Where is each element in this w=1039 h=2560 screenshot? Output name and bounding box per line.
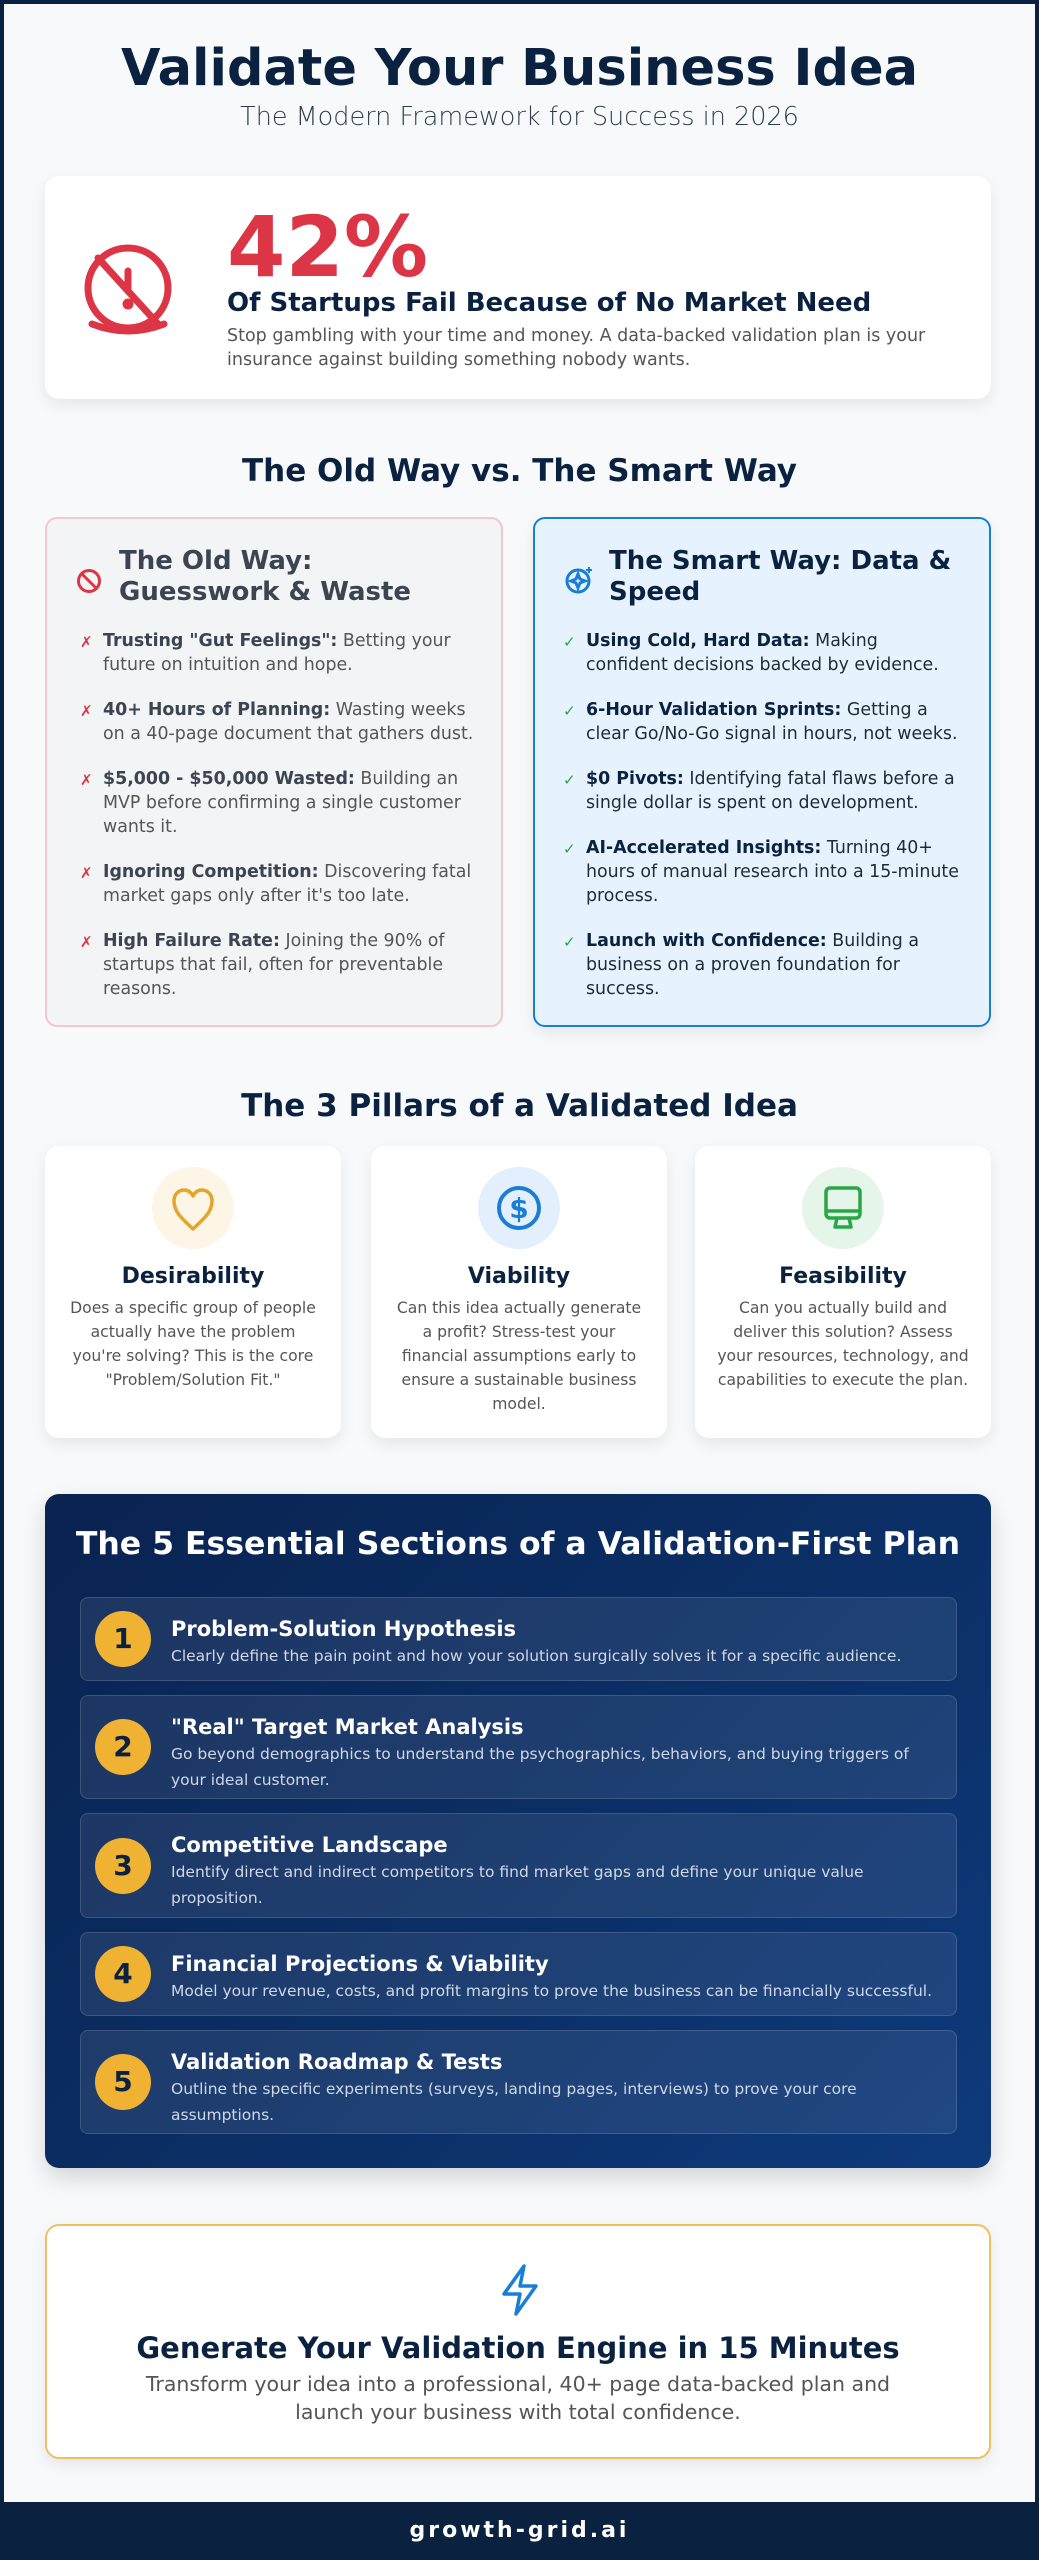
row 1 <box>80 1597 957 1681</box>
heading: 3 pillars: The 3 Pillars of a Validated Idea <box>241 1088 798 1124</box>
stat description: Stop gambling with your time and money. A data-backed validation plan is your insurance against building something nobody wants. <box>227 326 925 370</box>
row 3: Identify direct and indirect competitors to find market gaps and define your unique value proposition. <box>171 1863 864 1907</box>
CTA heading: Generate Your Validation Engine in 15 Minutes <box>136 2331 900 2365</box>
panel heading <box>609 546 951 607</box>
pillar: desirability: Does a specific group of people actually have the problem you're solving? This is the core "Problem/Solution Fit." <box>70 1299 316 1389</box>
row 5 <box>80 2030 957 2134</box>
row 1: 1 <box>113 1622 133 1655</box>
item list: Trusting "Gut Feelings": Betting your future on intuition and hope. <box>103 631 451 675</box>
icon: monitor <box>802 1167 884 1249</box>
pillar: feasibility: Can you actually build and <box>739 1299 947 1317</box>
pillar: feasibility: deliver this solution? Assess <box>733 1323 953 1341</box>
item list: ✗ <box>80 633 93 651</box>
item list: ✓ <box>563 771 576 789</box>
stat number: 42% <box>227 198 428 296</box>
item list: Launch with Confidence: Building a business on a proven foundation for success. <box>586 931 919 999</box>
footer <box>0 2502 1039 2560</box>
pillar: feasibility <box>695 1146 991 1438</box>
item list: confident decisions backed by evidence. <box>586 655 939 675</box>
row 2: Go beyond demographics to understand the psychographics, behaviors, and buying triggers of your ideal customer. <box>171 1745 909 1789</box>
panel: old way <box>45 517 503 1027</box>
item list: ✓ <box>563 702 576 720</box>
item list: ✗ <box>80 933 93 951</box>
footer: growth-grid.ai <box>410 2518 629 2543</box>
row 2 <box>80 1695 957 1799</box>
CTA description: Transform your idea into a professional, 40+ page data-backed plan and launch your business with total confidence. <box>146 2372 890 2424</box>
item list: ✓ <box>563 633 576 651</box>
item list: $5,000 - $50,000 Wasted: Building an MVP before confirming a single customer wants it. <box>103 769 461 837</box>
pillar: feasibility: Feasibility <box>779 1264 907 1289</box>
item list: 6-Hour Validation Sprints: Getting a clear Go/No-Go signal in hours, not weeks. <box>586 700 958 744</box>
panel heading: Speed <box>609 577 700 607</box>
pillar: feasibility: your resources, technology, and <box>717 1347 969 1365</box>
pillar: viability: Can this idea actually generate a profit? Stress-test your financial assumptions early to ensure a sustainable business model. <box>397 1299 641 1413</box>
row 4: 4 <box>113 1957 133 1990</box>
item list: ✗ <box>80 864 93 882</box>
row 5: Validation Roadmap & Tests <box>171 2050 502 2074</box>
row 1: Problem-Solution Hypothesis <box>171 1617 516 1641</box>
panel: smart way <box>533 517 991 1027</box>
item list: 40+ Hours of Planning: Wasting weeks on a 40-page document that gathers dust. <box>103 700 473 744</box>
item list <box>80 631 473 999</box>
row 5: Outline the specific experiments (surveys, landing pages, interviews) to prove your core assumptions. <box>171 2080 857 2124</box>
item list <box>563 631 959 999</box>
icon: lightning bolt <box>502 2264 538 2316</box>
row 3: 3 <box>113 1848 133 1882</box>
stat card <box>45 176 991 399</box>
panel heading <box>119 546 411 607</box>
item list: ✗ <box>80 771 93 789</box>
panel: 5 essential sections <box>45 1494 991 2168</box>
icon: dollar: $ <box>509 1192 529 1225</box>
title: Validate Your Business Idea <box>121 39 918 98</box>
icon: prohibited <box>77 569 101 593</box>
row 1: Clearly define the pain point and how your solution surgically solves it for a specific audience. <box>171 1647 901 1665</box>
panel heading: The Old Way: <box>119 546 312 576</box>
panel heading: The Smart Way: Data & <box>609 546 951 576</box>
item list: $0 Pivots: Identifying fatal flaws before a single dollar is spent on development. <box>586 769 955 813</box>
icon: heart <box>152 1167 234 1249</box>
item list: AI-Accelerated Insights: Turning 40+ hours of manual research into a 15-minute process. <box>586 838 959 906</box>
row 3 <box>80 1813 957 1918</box>
section heading: The 5 Essential Sections of a Validation-First Plan <box>76 1526 960 1562</box>
row 5: 5 <box>113 2065 133 2098</box>
stat headline: Of Startups Fail Because of No Market Need <box>227 288 871 318</box>
item list: High Failure Rate: Joining the 90% of startups that fail, often for preventable reasons. <box>103 931 445 999</box>
icon: dollar <box>478 1167 560 1249</box>
item list: ✗ <box>80 702 93 720</box>
icon: alarm warning <box>84 244 172 334</box>
subtitle: The Modern Framework for Success in 2026 <box>240 102 799 132</box>
row 2: "Real" Target Market Analysis <box>171 1715 524 1739</box>
row 4 <box>80 1932 957 2016</box>
panel heading: Guesswork & Waste <box>119 577 411 607</box>
item list: ✓ <box>563 840 576 858</box>
item list: Using Cold, Hard Data: Making <box>586 631 878 651</box>
heading: old vs smart: The Old Way vs. The Smart Way <box>242 453 797 489</box>
pillar: viability: Viability <box>468 1264 570 1289</box>
row 4: Model your revenue, costs, and profit margins to prove the business can be financially successful. <box>171 1982 932 2000</box>
pillar: feasibility: capabilities to execute the plan. <box>718 1371 968 1389</box>
icon: sparkle <box>566 567 592 594</box>
pillar: viability <box>371 1146 667 1438</box>
pillar: desirability: Desirability <box>122 1264 264 1289</box>
CTA card <box>45 2224 991 2459</box>
item list: ✓ <box>563 933 576 951</box>
row 2: 2 <box>113 1730 133 1763</box>
pillar: desirability <box>45 1146 341 1438</box>
row 3: Competitive Landscape <box>171 1833 448 1857</box>
row 4: Financial Projections & Viability <box>171 1952 549 1976</box>
item list: Ignoring Competition: Discovering fatal market gaps only after it's too late. <box>103 862 471 906</box>
